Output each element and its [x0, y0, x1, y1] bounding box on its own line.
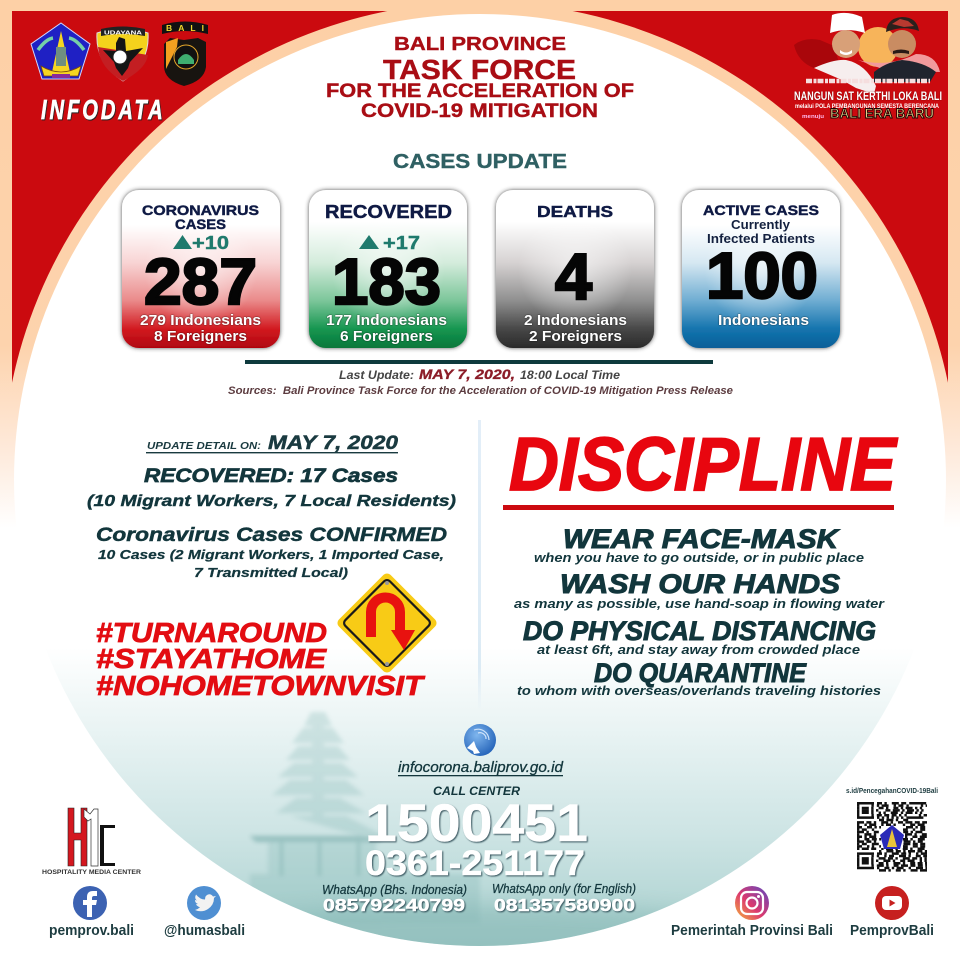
update detail block [87, 433, 456, 580]
panel: active cases: Currently [731, 218, 790, 232]
QR caption: s.id/PencegahanCOVID-19Bali [846, 788, 938, 795]
icon: u-turn road sign [335, 571, 439, 675]
logo: hospitality media center [42, 808, 141, 876]
icon: globe [464, 724, 496, 756]
discipline list: when you have to go outside, or in public place [534, 550, 864, 565]
QR code [857, 803, 927, 870]
website link: infocorona.baliprov.go.id [398, 759, 564, 776]
last update note: MAY 7, 2020, [419, 366, 515, 382]
handle: youtube: PemprovBali [850, 923, 934, 939]
governor portrait banner: menuju [802, 114, 824, 120]
update detail block: Coronavirus Cases CONFIRMED [96, 524, 447, 546]
governor portrait banner: BALI ERA BARU [830, 105, 934, 121]
call center numbers: 0361-251177 [365, 844, 585, 883]
title: BALI PROVINCE [394, 33, 566, 54]
hashtags: #STAYATHOME [96, 643, 327, 674]
discipline list: DO PHYSICAL DISTANCING [523, 616, 876, 646]
update detail block: RECOVERED: 17 Cases [144, 466, 398, 487]
discipline list: as many as possible, use hand-soap in flowing water [514, 596, 885, 611]
update detail block: MAY 7, 2020 [268, 433, 399, 454]
panel: deaths: 2 Foreigners [529, 329, 622, 345]
logo: Udayana shield [97, 26, 148, 81]
panel: active cases [682, 190, 840, 348]
whatsapp English: WhatsApp only (for English) [492, 882, 636, 896]
discipline list: to whom with overseas/overlands traveling histories [517, 683, 881, 698]
governor portrait banner [794, 13, 942, 121]
icon: instagram [735, 886, 769, 920]
panel: coronavirus cases: CASES [175, 216, 226, 232]
discipline list: DO QUARANTINE [594, 658, 807, 688]
discipline list: WASH OUR HANDS [560, 569, 840, 599]
update detail block: 7 Transmitted Local) [194, 565, 348, 580]
discipline list: WEAR FACE-MASK [563, 524, 840, 554]
call center numbers: CALL CENTER [433, 784, 520, 798]
handle: instagram: Pemerintah Provinsi Bali [671, 923, 833, 939]
whatsapp Indonesian: WhatsApp (Bhs. Indonesia) [322, 883, 467, 897]
panel: coronavirus cases: +10 [192, 233, 229, 253]
logo: Udayana shield: UDAYANA [104, 30, 142, 36]
hashtags [96, 617, 426, 701]
icon: up triangle [173, 235, 192, 249]
hashtags: #TURNAROUND [96, 617, 327, 648]
panel: recovered: 177 Indonesians [326, 313, 447, 329]
pagoda watermark [140, 712, 820, 960]
panel: active cases: ACTIVE CASES [703, 202, 819, 218]
logo text: INFODATA: INFODATA [41, 95, 163, 126]
divider under cards [245, 360, 713, 364]
left official in white [814, 60, 876, 94]
logo: Bali province pentagon crest [31, 23, 90, 79]
panel: coronavirus cases: CORONAVIRUS [142, 202, 259, 218]
sources note: Sources: Bali Province Task Force for the Acceleration of COVID-19 Mitigation Press Release [228, 385, 733, 397]
panel: deaths: 2 Indonesians [524, 313, 627, 329]
title [326, 33, 634, 122]
title: FOR THE ACCELERATION OF [326, 81, 634, 102]
panel: active cases: Indonesians [718, 313, 809, 329]
hashtags: #NOHOMETOWNVISIT [96, 670, 426, 701]
title: COVID-19 MITIGATION [361, 101, 598, 122]
icon: youtube [875, 886, 909, 920]
heading: cases update: CASES UPDATE [393, 151, 567, 173]
call center numbers: 1500451 [365, 794, 588, 853]
handle: facebook: pemprov.bali [49, 923, 134, 939]
update detail block: (10 Migrant Workers, 7 Local Residents) [87, 493, 456, 510]
last update note: Last Update: [339, 368, 414, 382]
panel: recovered [309, 190, 467, 348]
whatsapp Indonesian: 085792240799 [323, 895, 465, 915]
red corner banner [12, 11, 948, 411]
icon: up triangle [359, 235, 379, 249]
update detail block: UPDATE DETAIL ON: [147, 441, 261, 452]
panel: deaths: 4 [555, 240, 592, 313]
panel: recovered: RECOVERED [325, 202, 452, 222]
icon: twitter [187, 886, 221, 920]
call center numbers [365, 784, 588, 883]
panel: coronavirus cases [122, 190, 280, 348]
last update note: 18:00 Local Time [520, 368, 620, 382]
panel: active cases: 100 [706, 239, 818, 312]
panel: recovered: 183 [332, 245, 441, 318]
last update note [339, 366, 620, 382]
discipline list [514, 524, 885, 698]
panel: recovered: +17 [383, 233, 420, 253]
discipline list: at least 6ft, and stay away from crowded place [537, 642, 860, 657]
panel: recovered: 6 Foreigners [340, 329, 433, 345]
panel: active cases: Infected Patients [707, 232, 815, 246]
title: TASK FORCE [383, 54, 576, 85]
whatsapp Indonesian [322, 883, 467, 915]
governor portrait banner: melalui POLA PEMBANGUNAN SEMESTA BERENCANA [795, 104, 940, 110]
panel: coronavirus cases: 279 Indonesians [140, 313, 261, 329]
vertical divider [478, 420, 481, 712]
handle: twitter: @humasbali [164, 923, 245, 939]
logo: Bali police shield [162, 22, 208, 86]
panel: deaths [496, 190, 654, 348]
logo: Bali police shield: BALI [166, 23, 204, 33]
script line [806, 79, 930, 83]
panel: coronavirus cases: 8 Foreigners [154, 329, 247, 345]
panel: deaths: DEATHS [537, 204, 613, 221]
sunset and island backdrop [794, 39, 840, 68]
update detail block: 10 Cases (2 Migrant Workers, 1 Imported Case, [98, 547, 444, 562]
logo: hospitality media center: HOSPITALITY MEDIA CENTER [42, 869, 141, 876]
whatsapp English: 081357580900 [494, 895, 635, 915]
heading: discipline: DISCIPLINE [509, 422, 898, 506]
whatsapp English [492, 882, 636, 915]
discipline rule [503, 505, 894, 510]
right official in black [874, 60, 936, 82]
icon: facebook [73, 886, 107, 920]
panel: coronavirus cases: 287 [144, 245, 257, 318]
